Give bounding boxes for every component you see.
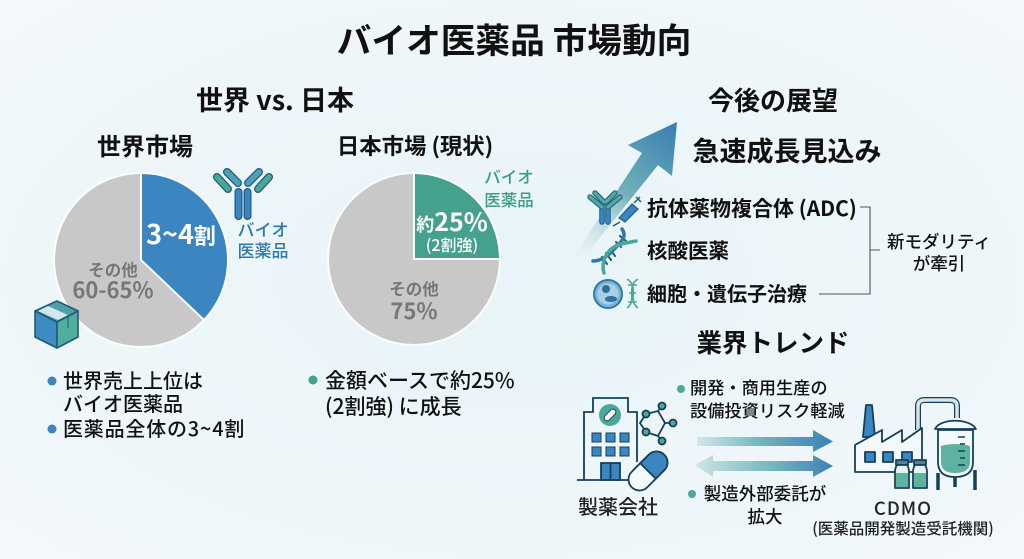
icon: antibody and syringe (590, 193, 641, 226)
icon: DNA (593, 229, 636, 273)
text: nucleic acid: 核酸医薬 (647, 234, 729, 264)
arrow: CDMO to pharma (695, 455, 833, 477)
text block: risk reduction (677, 374, 845, 422)
text block: world bullets: 医薬品全体の3~4割 (63, 413, 245, 442)
text block: outsourcing (688, 481, 827, 529)
label: biologics share: 約25% (416, 203, 488, 239)
icon: box (35, 301, 78, 348)
pie chart: japan market (328, 173, 500, 345)
label: pharma company: 製薬会社 (578, 491, 658, 520)
label: others share: その他 (389, 276, 439, 300)
icon: cell and DNA (594, 279, 638, 308)
label: biologics: 医薬品 (238, 237, 288, 262)
label: CDMO definition: (医薬品開発製造受託機関) (812, 517, 994, 539)
icon: CDMO factory and tank (855, 400, 976, 490)
text block: japan bullets: 金額ベースで約25% (325, 365, 515, 395)
text block: japan bullets (308, 365, 515, 421)
label: biologics: バイオ (238, 216, 288, 241)
text block: world bullets: バイオ医薬品 (63, 388, 183, 417)
panel: world market (35, 127, 288, 348)
heading: japan market: 日本市場 (現状) (337, 129, 493, 161)
icon: molecule (640, 402, 676, 444)
label: new modalities: 新モダリティ (887, 229, 991, 254)
text block: world bullets: 世界売上上位は (63, 365, 203, 394)
text block: japan bullets: (2割強) に成長 (325, 391, 462, 421)
heading: world vs Japan: 世界 vs. 日本 (196, 79, 354, 118)
label: others share: その他 (88, 257, 138, 281)
heading: outlook: 今後の展望 (708, 81, 838, 118)
icon: pharma company building (577, 398, 637, 480)
text block: risk reduction: 設備投資リスク軽減 (690, 397, 845, 422)
text block: world bullets (48, 365, 245, 442)
icon: antibody (217, 172, 269, 216)
heading: industry trends: 業界トレンド (696, 323, 850, 360)
arrow: rapid growth (570, 122, 677, 262)
panel: japan market (328, 129, 534, 345)
label: biologics: 医薬品 (484, 187, 534, 211)
heading: world market: 世界市場 (97, 127, 193, 162)
bracket: modality grouping (819, 207, 880, 294)
text block: risk reduction: 開発・商用生産の (690, 374, 828, 399)
arrow: pharma to CDMO (697, 430, 833, 452)
label: others share: 60-65% (72, 273, 154, 305)
label: biologics share: (2割強) (426, 232, 478, 256)
heading: rapid growth: 急速成長見込み (692, 130, 882, 169)
text: ADC: 抗体薬物複合体 (ADC) (647, 193, 857, 223)
label: new modalities: が牽引 (913, 251, 965, 276)
title: バイオ医薬品 市場動向 (337, 13, 691, 63)
icon: capsule (624, 447, 672, 495)
label: biologics share: 3~4割 (146, 213, 216, 252)
text block: outsourcing: 拡大 (748, 504, 782, 529)
label: biologics: バイオ (484, 164, 534, 188)
text: cell and gene therapy: 細胞・遺伝子治療 (647, 278, 807, 307)
pie chart: world market (54, 173, 228, 347)
text block: outsourcing: 製造外部委託が (704, 481, 827, 506)
label: others share: 75% (390, 294, 438, 326)
label: CDMO: CDMO (874, 495, 932, 521)
